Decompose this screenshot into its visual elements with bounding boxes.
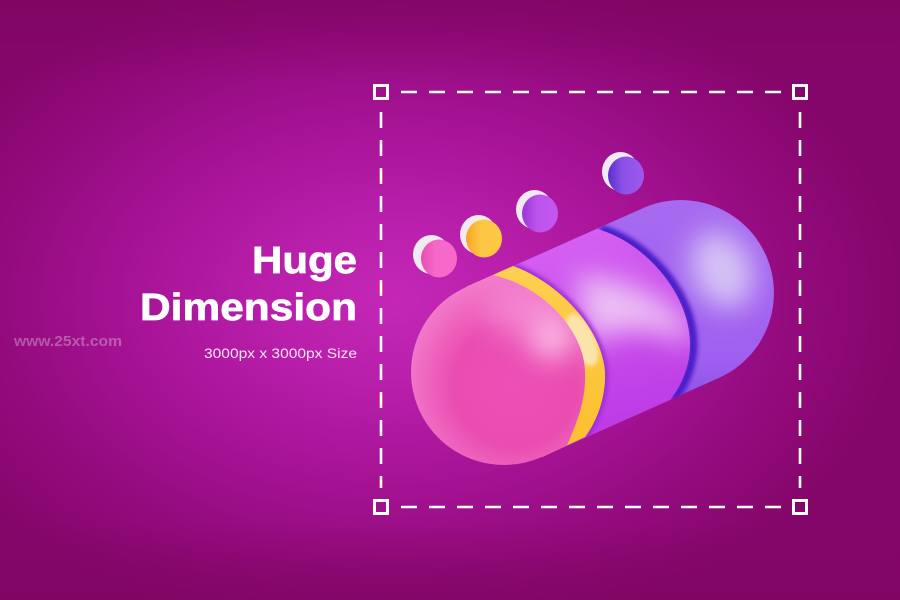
capsule illustration	[411, 200, 774, 465]
capsule: magenta band	[466, 229, 690, 457]
subheading: 3000px x 3000px Size	[204, 346, 357, 361]
heading	[140, 240, 357, 329]
icon: yellow small pill	[460, 215, 502, 258]
dimension frame	[374, 86, 806, 514]
icon: violet small pill	[602, 152, 644, 194]
icon: purple small pill	[516, 190, 558, 232]
capsule: yellow band	[466, 266, 605, 457]
capsule: pink end	[411, 275, 585, 465]
heading: Dimension	[140, 287, 357, 329]
icon: pink small pill	[413, 235, 457, 278]
capsule: violet end	[411, 200, 774, 465]
watermark: www.25xt.com	[13, 334, 122, 350]
heading: Huge	[252, 240, 357, 282]
